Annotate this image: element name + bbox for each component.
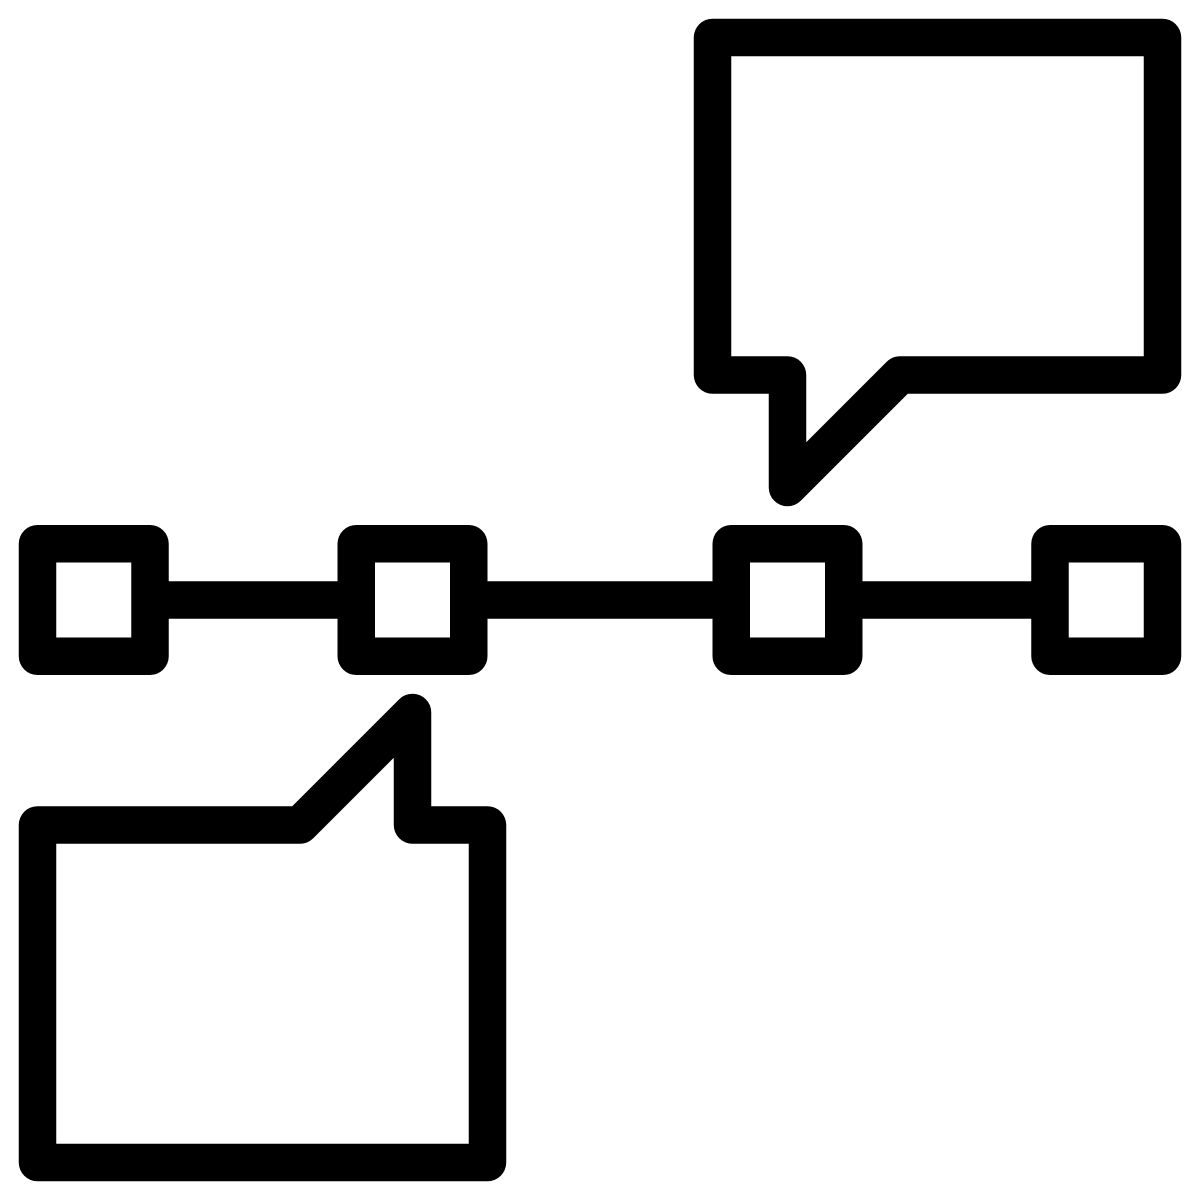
node: fourth square bbox=[1050, 544, 1162, 656]
connector: third to fourth node bbox=[844, 581, 1050, 619]
node: first square bbox=[38, 544, 150, 656]
connector: first to second node bbox=[150, 581, 356, 619]
node: third square bbox=[731, 544, 844, 656]
connector: second to third node bbox=[469, 581, 731, 619]
node: second square bbox=[356, 544, 469, 656]
callout: lower speech bubble bbox=[38, 712, 488, 1162]
callout: upper speech bubble bbox=[712, 38, 1162, 488]
